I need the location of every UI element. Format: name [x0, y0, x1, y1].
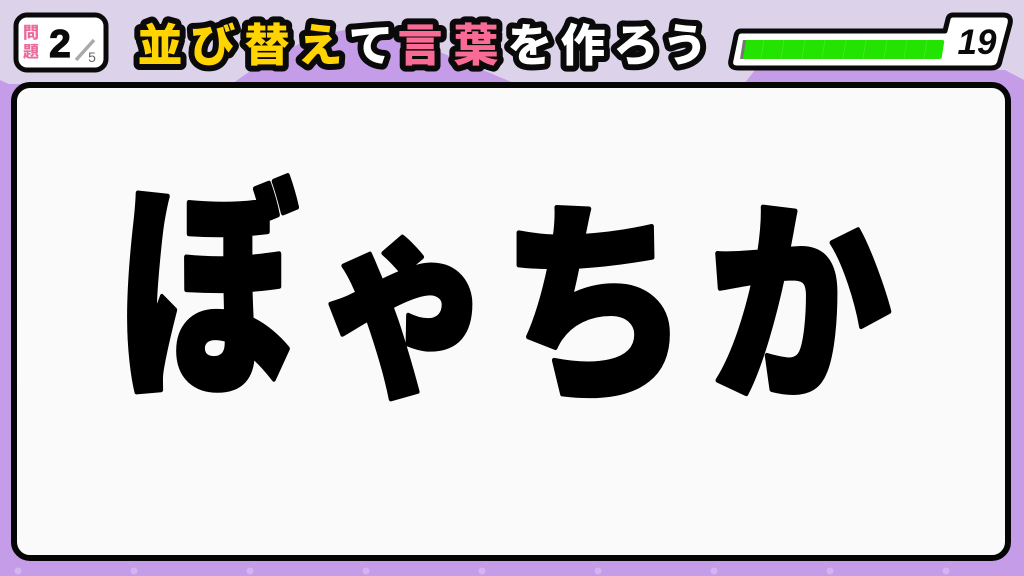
title: 葉: [453, 9, 499, 74]
panel: answer card: [14, 85, 1008, 558]
label: question: 問: [23, 19, 39, 43]
question number: 2: [49, 23, 71, 66]
title: う: [662, 9, 708, 74]
label: question: 題: [23, 38, 39, 62]
title: 並: [137, 9, 183, 74]
scrambled word: ぼ: [119, 105, 299, 442]
panel: question counter: [16, 15, 106, 70]
label: question: [23, 19, 39, 62]
title: て: [348, 9, 394, 74]
timer number: 19: [958, 23, 997, 62]
scrambled word: ゃ: [316, 136, 493, 441]
scrambled word: ち: [500, 133, 690, 444]
title: 作: [560, 9, 606, 74]
title: び: [190, 9, 236, 74]
title: を: [507, 9, 553, 74]
panel: timer: [731, 15, 1010, 68]
title: [137, 9, 708, 74]
title: え: [297, 9, 343, 74]
timer progress bar: [740, 40, 944, 59]
title: ろ: [613, 9, 659, 74]
title: 替: [244, 9, 290, 74]
scrambled word: [119, 105, 891, 445]
total questions: 5: [88, 49, 96, 65]
title: 言: [397, 9, 443, 74]
scrambled word: か: [709, 133, 891, 445]
